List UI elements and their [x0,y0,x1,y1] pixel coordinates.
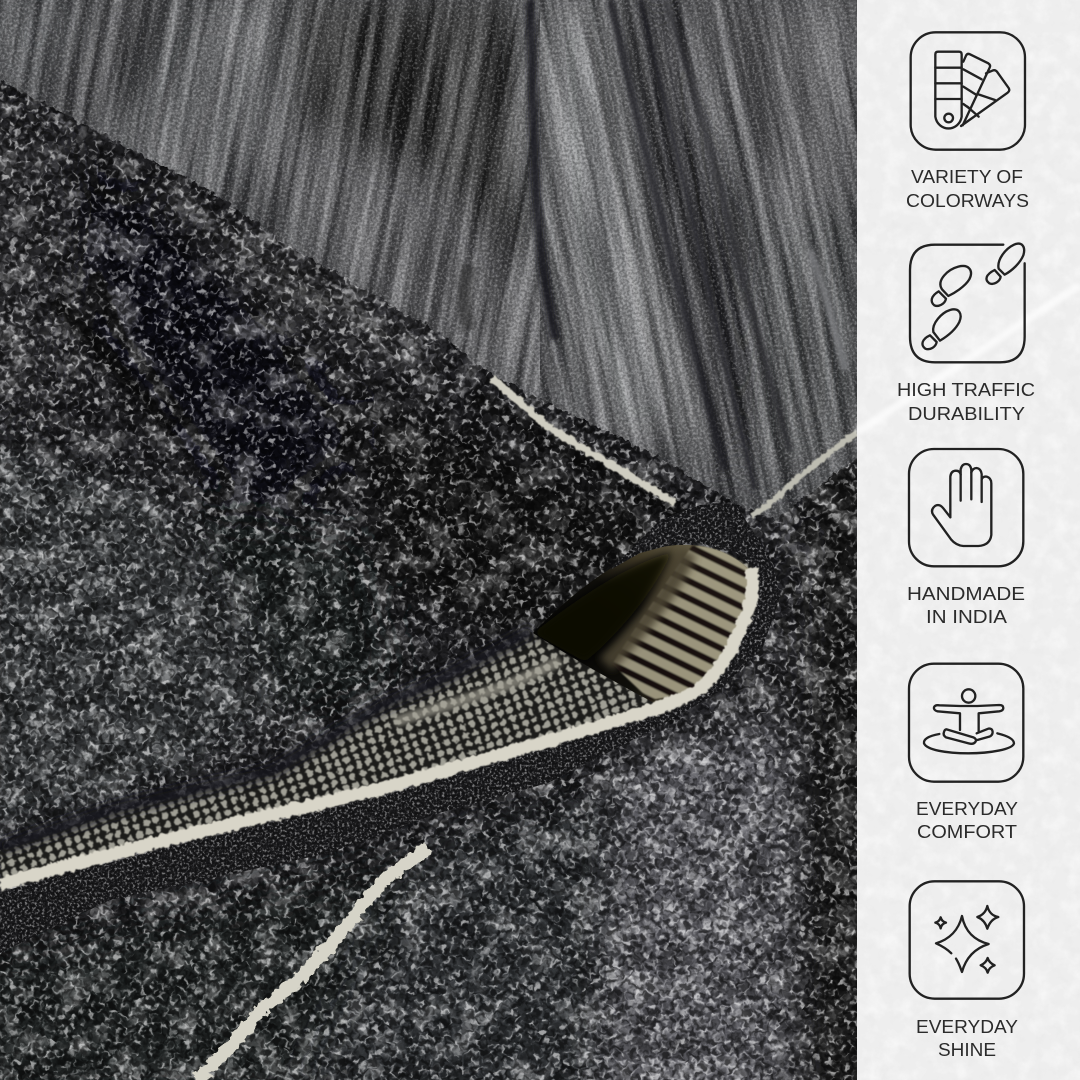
label: handmade in india: IN INDIA [926,606,1008,627]
panel: features sidebar [857,0,1080,1080]
cream edge line [0,568,752,884]
label: everyday shine [916,1016,1018,1060]
dark crease on flap [55,300,175,430]
photo: rolled dark rug [0,0,857,1080]
floor streaks: fanning pile, left side [0,0,540,398]
floor streaks: fanning pile, right side [540,0,857,518]
label: variety of colorways: COLORWAYS [906,190,1029,211]
label: everyday comfort: EVERYDAY [916,798,1018,819]
label: variety of colorways: VARIETY OF [911,166,1023,187]
cream border line: far right [752,432,857,516]
label: everyday comfort: COMFORT [917,821,1017,842]
floor dark furrows [464,0,845,490]
floor fine grain [0,0,857,560]
icon: raised hand [909,449,1023,566]
label: everyday shine: EVERYDAY [916,1016,1018,1037]
cream border line: lower [197,847,428,1080]
icon: seated meditation figure [909,664,1023,782]
label: variety of colorways [906,166,1029,211]
dark rim of fold and lower fringe [0,503,780,953]
icon: footprints [910,244,1025,362]
feature: handmade in india [907,449,1025,627]
icon: sparkles [910,881,1024,999]
icon: colour swatch fan [911,32,1025,150]
label: everyday comfort [916,798,1018,842]
underside woven backing [0,545,752,887]
far cream line on flap [492,378,675,503]
label: handmade in india: HANDMADE [907,583,1025,604]
dark crease along flap edge [470,395,690,520]
inner band on backing [395,660,560,722]
label: high traffic durability [897,379,1035,424]
feature: high traffic durability [897,244,1035,424]
shadow on upper side of backing [0,631,533,848]
label: high traffic durability: DURABILITY [908,403,1025,424]
label: everyday shine: SHINE [938,1039,996,1060]
label: handmade in india [907,583,1025,627]
fold cavity [533,545,753,706]
feature: everyday shine [910,881,1024,1060]
feature: everyday comfort [909,664,1023,842]
feature: variety of colorways [906,32,1029,211]
rug floor surface [0,0,857,522]
label: high traffic durability: HIGH TRAFFIC [897,379,1035,400]
